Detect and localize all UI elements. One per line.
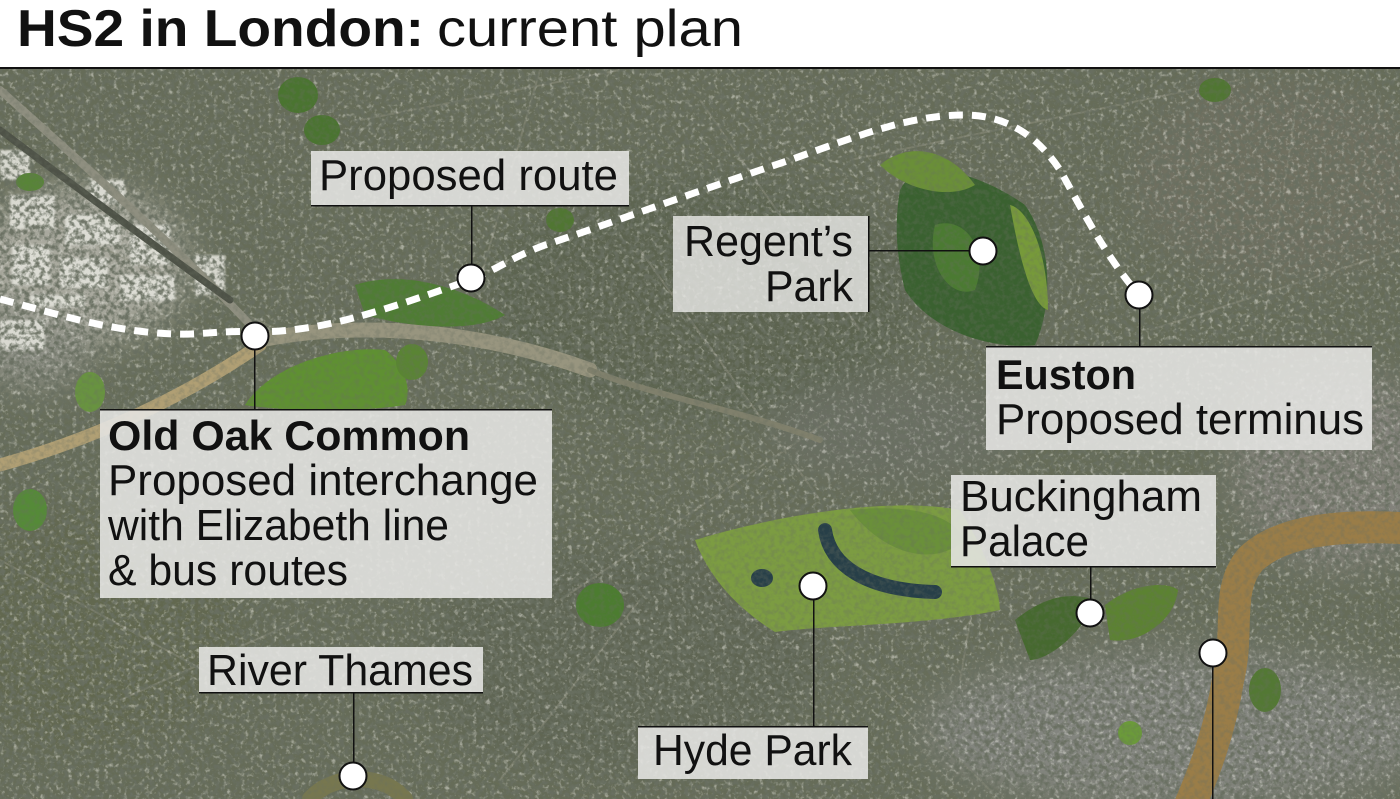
Wormwood Scrubs <box>245 349 408 410</box>
River Thames east <box>1190 527 1400 799</box>
marker: River Thames east <box>1200 640 1226 799</box>
header rule <box>0 67 1400 69</box>
Scrubs rail park <box>355 279 505 327</box>
label: Regent's Park: Park <box>765 262 854 311</box>
label: Old Oak Common: with Elizabeth line <box>107 501 449 550</box>
label: Old Oak Common: Proposed interchange <box>108 456 538 505</box>
label: Regent's Park: Regent’s <box>684 217 853 266</box>
small greens <box>13 489 47 531</box>
Regent's Park <box>897 171 1047 346</box>
label: Buckingham Palace: Palace <box>960 517 1089 566</box>
Serpentine <box>825 530 935 592</box>
Green Park and palace gardens <box>1015 596 1095 660</box>
label: River Thames: River Thames <box>207 646 473 695</box>
River Thames west <box>310 779 405 799</box>
label: Euston: Euston <box>996 351 1136 398</box>
label: proposed route <box>311 151 629 292</box>
label: Hyde Park <box>638 572 868 779</box>
label: Old Oak Common <box>100 322 552 598</box>
label: Hyde Park: Hyde Park <box>653 726 853 775</box>
label: proposed route: Proposed route <box>319 151 618 200</box>
subtitle: current plan <box>437 0 743 58</box>
parks <box>13 77 1281 745</box>
label: Regent's Park <box>673 216 996 312</box>
Hyde Park <box>695 505 1000 632</box>
railway lands <box>0 90 820 465</box>
label: Euston <box>986 282 1372 450</box>
label: Old Oak Common: & bus routes <box>108 546 348 595</box>
label: River Thames <box>199 646 483 790</box>
water <box>310 527 1400 799</box>
label: Old Oak Common: Old Oak Common <box>108 412 470 459</box>
title: HS2 in London: <box>17 0 424 58</box>
label: Euston: Proposed terminus <box>996 395 1364 444</box>
label: Buckingham Palace <box>951 472 1216 626</box>
label: Buckingham Palace: Buckingham <box>960 472 1202 521</box>
industrial white blocks <box>0 150 225 350</box>
proposed route dashed line <box>0 115 1139 334</box>
